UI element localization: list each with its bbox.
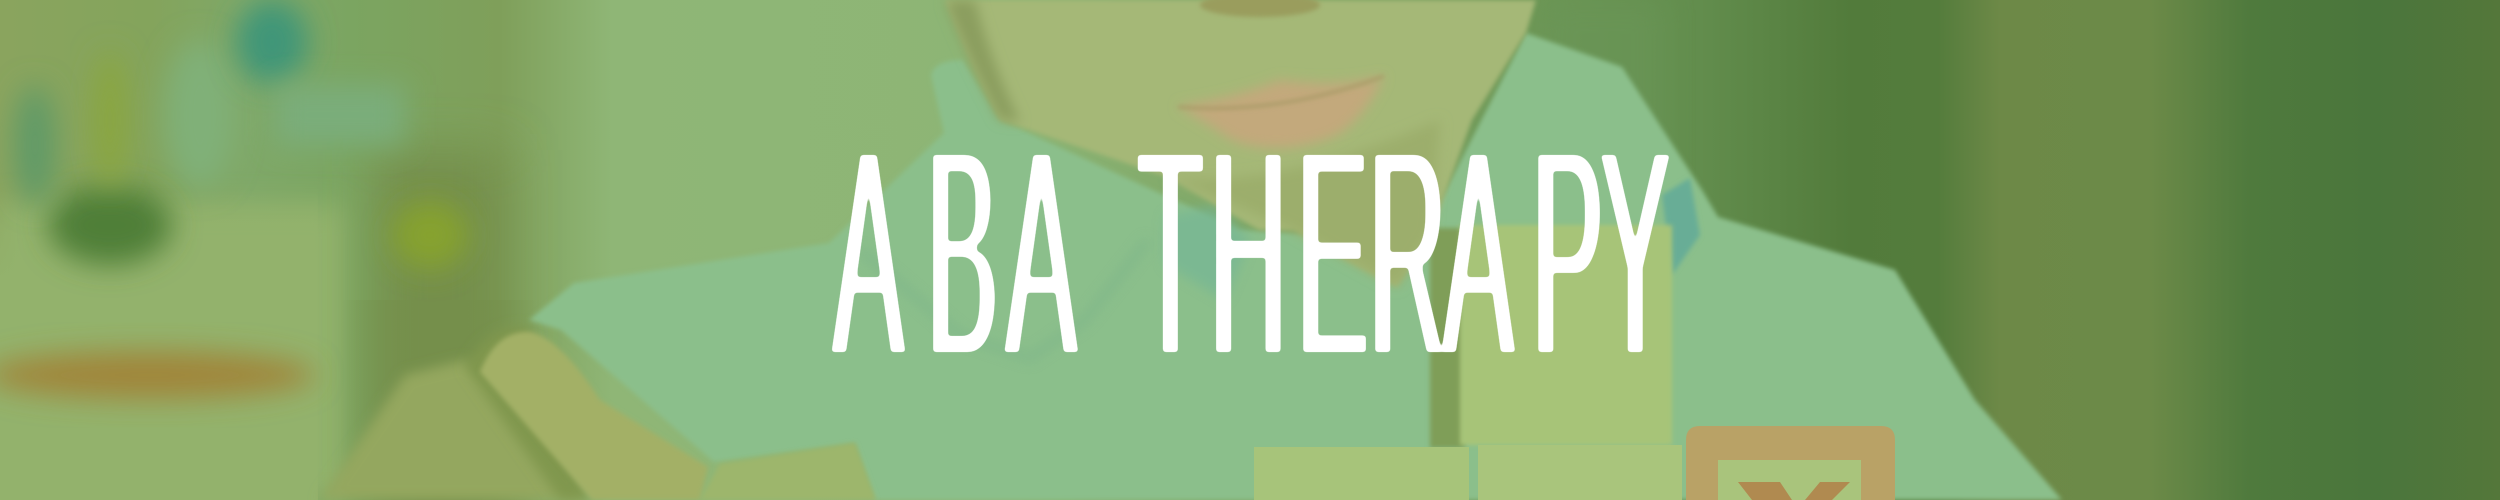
nose <box>1200 0 1320 17</box>
placket shadow <box>1165 205 1250 300</box>
hand <box>319 327 876 500</box>
stacked wooden blocks <box>1254 225 1895 500</box>
collar underside <box>1662 178 1700 275</box>
shirt <box>529 33 2062 500</box>
title: ABA THERAPY <box>833 88 1671 418</box>
mouth <box>1178 76 1384 148</box>
letter block <box>1686 426 1895 500</box>
face and neck <box>945 0 1536 287</box>
neck shading <box>1167 120 1440 287</box>
collar shadow <box>860 240 1148 358</box>
blurred toys on the left <box>0 0 540 500</box>
right background column <box>1545 0 1665 240</box>
